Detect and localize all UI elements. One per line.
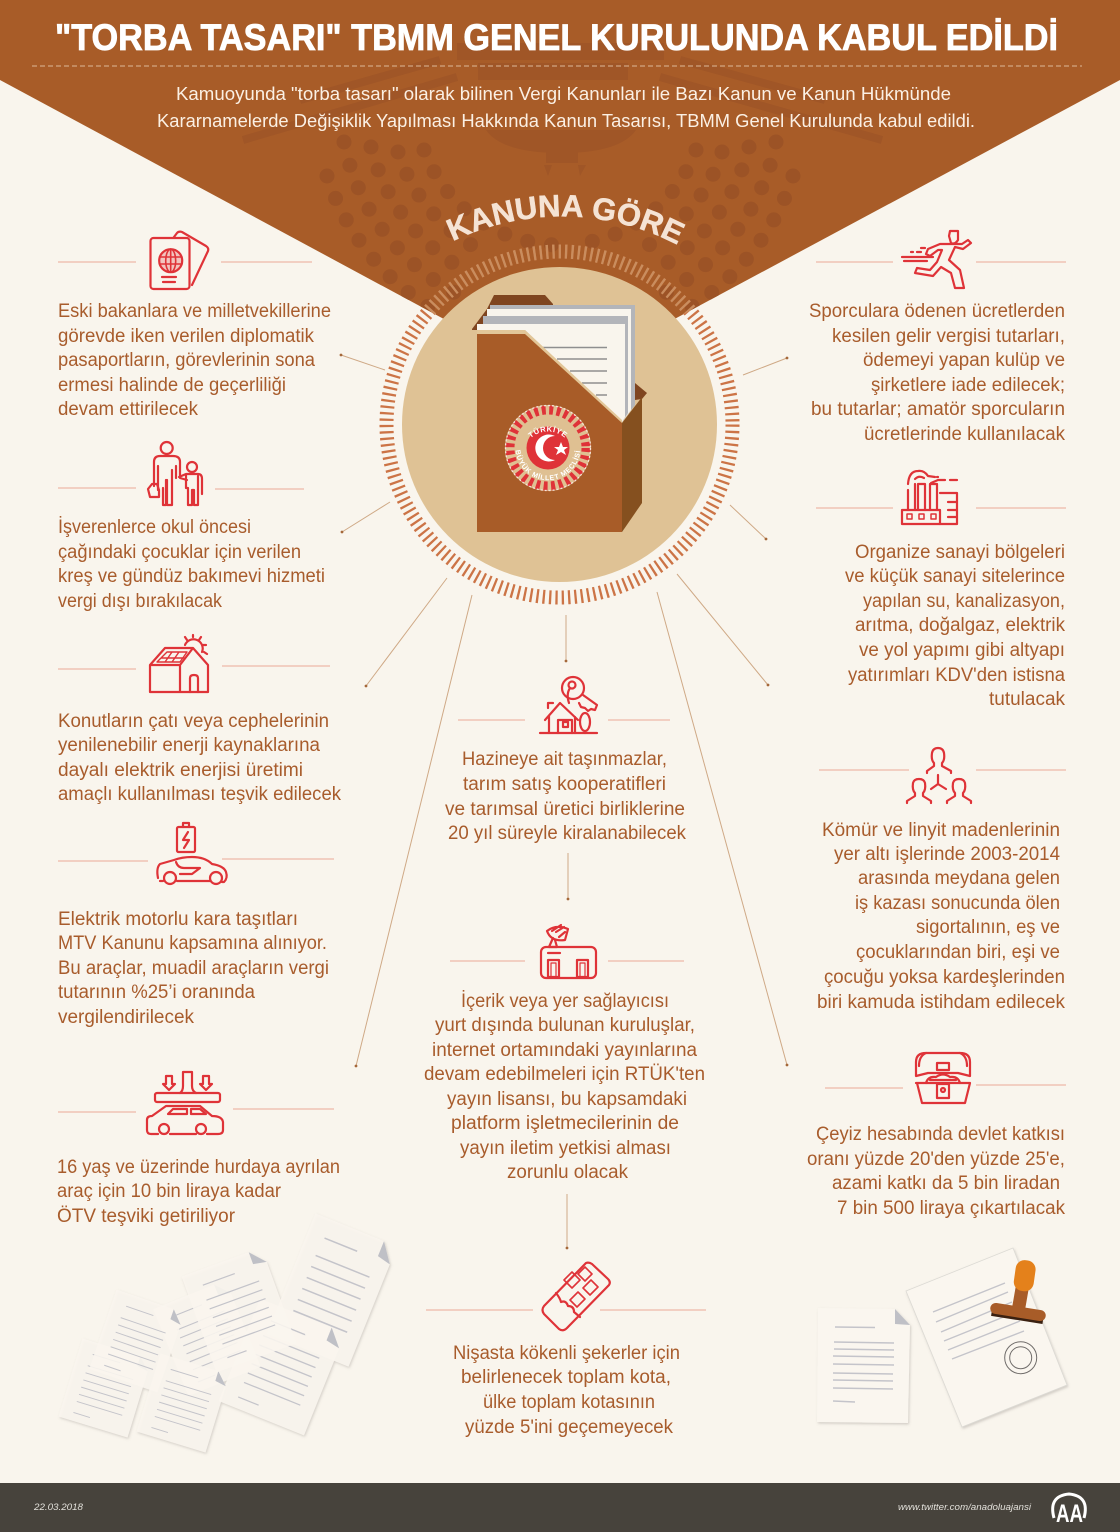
heading: kanuna göre: KANUNA GÖRE — [446, 194, 686, 245]
text: industrial zones: yapılan su, kanalizasyon, — [863, 591, 1065, 612]
text: treasury land: ve tarımsal üretici birliklerine — [445, 799, 685, 820]
text: passports: devam ettirilecek — [58, 399, 198, 420]
Anadolu Agency logo: AA — [1056, 1500, 1083, 1528]
text: mining accidents: Kömür ve linyit madenlerinin — [822, 820, 1060, 841]
parliament seal — [504, 404, 592, 492]
Anadolu Agency logo — [1053, 1494, 1085, 1528]
text: scrapped vehicles: araç için 10 bin liraya kadar — [57, 1181, 282, 1202]
text: renewable energy — [58, 711, 341, 805]
icon: parent and child — [148, 442, 202, 505]
text: passports: pasaportların, görevlerinin sona — [58, 350, 315, 371]
text: athletes tax — [809, 301, 1065, 445]
text: mining accidents: iş kazası sonucunda ölen — [855, 893, 1060, 914]
panel: treasury land — [445, 677, 686, 844]
icon: satellite dish and building — [541, 925, 596, 978]
panel: mining accidents — [817, 748, 1066, 1013]
text: industrial zones: tutulacak — [989, 689, 1065, 710]
text: athletes tax: şirketlere iade edilecek; — [871, 375, 1065, 396]
text: starch sugar quota: ülke toplam kotasının — [483, 1392, 655, 1413]
parliament hall watermark — [274, 58, 810, 312]
text: electric vehicles: vergilendirilecek — [58, 1007, 194, 1028]
text: dowry account: oranı yüzde 20'den yüzde 25'e, — [807, 1149, 1065, 1170]
text: treasury land — [445, 749, 686, 844]
icon: factory — [902, 471, 957, 524]
text: broadcasting licence: yayın lisansı, bu kapsamdaki — [447, 1089, 687, 1110]
text: starch sugar quota: Nişasta kökenli şekerler için — [453, 1343, 680, 1364]
text: passports — [58, 301, 331, 420]
title: "TORBA TASARI" TBMM GENEL KURULUNDA KABUL EDİLDİ — [55, 17, 1058, 58]
text: broadcasting licence: internet ortamındaki yayınlarına — [432, 1040, 697, 1061]
text: industrial zones: ve yol yapımı gibi altyapı — [859, 640, 1065, 661]
text: starch sugar quota — [453, 1343, 680, 1438]
panel: RTÜK broadcasting licence — [424, 925, 705, 1183]
parliament seal: BÜYÜK MİLLET MECLİSİ — [516, 450, 580, 480]
text: renewable energy: dayalı elektrik enerjisi üretimi — [58, 760, 303, 781]
text: electric vehicles: Elektrik motorlu kara taşıtları — [58, 909, 298, 930]
text: scrapped vehicles: 16 yaş ve üzerinde hurdaya ayrılan — [57, 1157, 340, 1178]
text: broadcasting licence: yayın iletim yetkisi alması — [460, 1138, 671, 1159]
text: industrial zones: Organize sanayi bölgeleri — [855, 542, 1065, 563]
text: electric vehicles: tutarının %25’i oranında — [58, 982, 255, 1003]
text: childcare — [58, 517, 325, 612]
header banner — [0, 0, 1120, 318]
text: scrapped vehicles: ÖTV teşviki getiriliyor — [57, 1206, 236, 1227]
parliament seal: TÜRKİYE — [528, 426, 568, 438]
central emblem: folder in circle — [380, 244, 740, 604]
text: dowry account — [807, 1124, 1065, 1219]
text: broadcasting licence — [424, 991, 705, 1183]
text: childcare: İşverenlerce okul öncesi — [58, 517, 251, 538]
folder — [472, 295, 647, 532]
illustration: document and stamp — [817, 1248, 1067, 1427]
icon: chocolate bar — [542, 1263, 610, 1330]
text: mining accidents: yer altı işlerinde 2003-2014 — [834, 844, 1060, 865]
text: treasury land: 20 yıl süreyle kiralanabilecek — [448, 823, 686, 844]
text: treasury land: Hazineye ait taşınmazlar, — [462, 749, 667, 770]
icon: house with key — [540, 677, 597, 733]
text: passports: Eski bakanlara ve milletvekillerine — [58, 301, 331, 322]
text: renewable energy: amaçlı kullanılması teşvik edilecek — [58, 784, 341, 805]
text: renewable energy: Konutların çatı veya cephelerinin — [58, 711, 329, 732]
stamped sheet — [906, 1248, 1067, 1427]
text: childcare: kreş ve gündüz bakımevi hizmeti — [58, 566, 325, 587]
icon: three people — [907, 748, 971, 803]
panel: electric vehicles — [58, 823, 334, 1028]
text: dowry account: azami katkı da 5 bin liradan — [832, 1173, 1060, 1194]
text: mining accidents: çocuğu yoksa kardeşlerinden — [824, 967, 1065, 988]
text: electric vehicles: MTV Kanunu kapsamına alınıyor. — [58, 933, 327, 954]
illustration: scattered documents — [59, 1213, 397, 1453]
icon: treasure chest — [916, 1053, 970, 1103]
text: passports: ermesi halinde de geçerliliği — [58, 375, 286, 396]
text: athletes tax: bu tutarlar; amatör sporcuların — [811, 399, 1065, 420]
text: athletes tax: kesilen gelir vergisi tutarları, — [832, 326, 1065, 347]
icon: running athlete — [902, 231, 971, 288]
text: industrial zones: yatırımları KDV'den istisna — [848, 665, 1065, 686]
intro text: Kararnamelerde Değişiklik Yapılması Hakkında Kanun Tasarısı, TBMM Genel Kurulunda kabul edildi. — [157, 111, 975, 131]
text: childcare: çağındaki çocuklar için verilen — [58, 542, 301, 563]
panel: industrial zones — [816, 471, 1066, 710]
text: broadcasting licence: devam edebilmeleri için RTÜK'ten — [424, 1064, 705, 1085]
text: industrial zones: ve küçük sanayi sitelerince — [845, 566, 1065, 587]
icon: car under press — [147, 1072, 223, 1134]
text: treasury land: tarım satış kooperatifleri — [463, 774, 666, 795]
text: mining accidents: arasında meydana gelen — [858, 868, 1060, 889]
connector lines — [340, 354, 788, 1249]
panel: childcare — [58, 442, 325, 612]
text: broadcasting licence: İçerik veya yer sağlayıcısı — [461, 991, 669, 1012]
icon: battery and electric car — [157, 823, 227, 884]
text: broadcasting licence: platform işletmecilerinin de — [451, 1113, 679, 1134]
text: athletes tax: ödemeyi yapan kulüp ve — [863, 350, 1065, 371]
panel: diplomatic passports — [58, 232, 331, 420]
text: athletes tax: Sporculara ödenen ücretlerden — [809, 301, 1065, 322]
footer date: 22.03.2018 — [33, 1502, 83, 1512]
text: scrapped vehicles — [57, 1157, 340, 1227]
rubber stamp — [989, 1259, 1047, 1324]
text: dowry account: 7 bin 500 liraya çıkartılacak — [837, 1198, 1065, 1219]
panel: scrapped vehicles — [57, 1072, 340, 1227]
text: dowry account: Çeyiz hesabında devlet katkısı — [816, 1124, 1065, 1145]
panel: starch sugar quota — [426, 1263, 706, 1438]
panel: dowry account — [807, 1053, 1066, 1219]
text: broadcasting licence: zorunlu olacak — [507, 1162, 628, 1183]
text: electric vehicles: Bu araçlar, muadil araçların vergi — [58, 958, 329, 979]
text: electric vehicles — [58, 909, 329, 1028]
icon: passport — [150, 232, 208, 289]
footer — [0, 1483, 1120, 1532]
text: mining accidents: sigortalının, eş ve — [916, 917, 1060, 938]
text: childcare: vergi dışı bırakılacak — [58, 591, 222, 612]
panel: athletes tax — [809, 231, 1066, 445]
document sheet — [817, 1308, 910, 1423]
intro text: Kamuoyunda "torba tasarı" olarak bilinen Vergi Kanunları ile Bazı Kanun ve Kanun Hükmünde — [176, 84, 951, 104]
text: industrial zones: arıtma, doğalgaz, elektrik — [855, 615, 1065, 636]
text: renewable energy: yenilenebilir enerji kaynaklarına — [58, 735, 320, 756]
intro text — [157, 84, 975, 131]
text: starch sugar quota: yüzde 5'ini geçemeyecek — [465, 1417, 673, 1438]
text: athletes tax: ücretlerinde kullanılacak — [864, 424, 1065, 445]
text: mining accidents: çocuklarından biri, eşi ve — [856, 942, 1060, 963]
text: mining accidents — [817, 820, 1065, 1013]
text: industrial zones — [845, 542, 1065, 710]
text: passports: görevde iken verilen diplomatik — [58, 326, 314, 347]
text: starch sugar quota: belirlenecek toplam kota, — [461, 1367, 671, 1388]
footer twitter link: www.twitter.com/anadoluajansi — [898, 1502, 1032, 1512]
text: broadcasting licence: yurt dışında bulunan kuruluşlar, — [435, 1015, 695, 1036]
icon: house with solar panel and sun — [150, 635, 208, 692]
panel: renewable energy on homes — [58, 635, 341, 805]
text: mining accidents: biri kamuda istihdam edilecek — [817, 992, 1065, 1013]
